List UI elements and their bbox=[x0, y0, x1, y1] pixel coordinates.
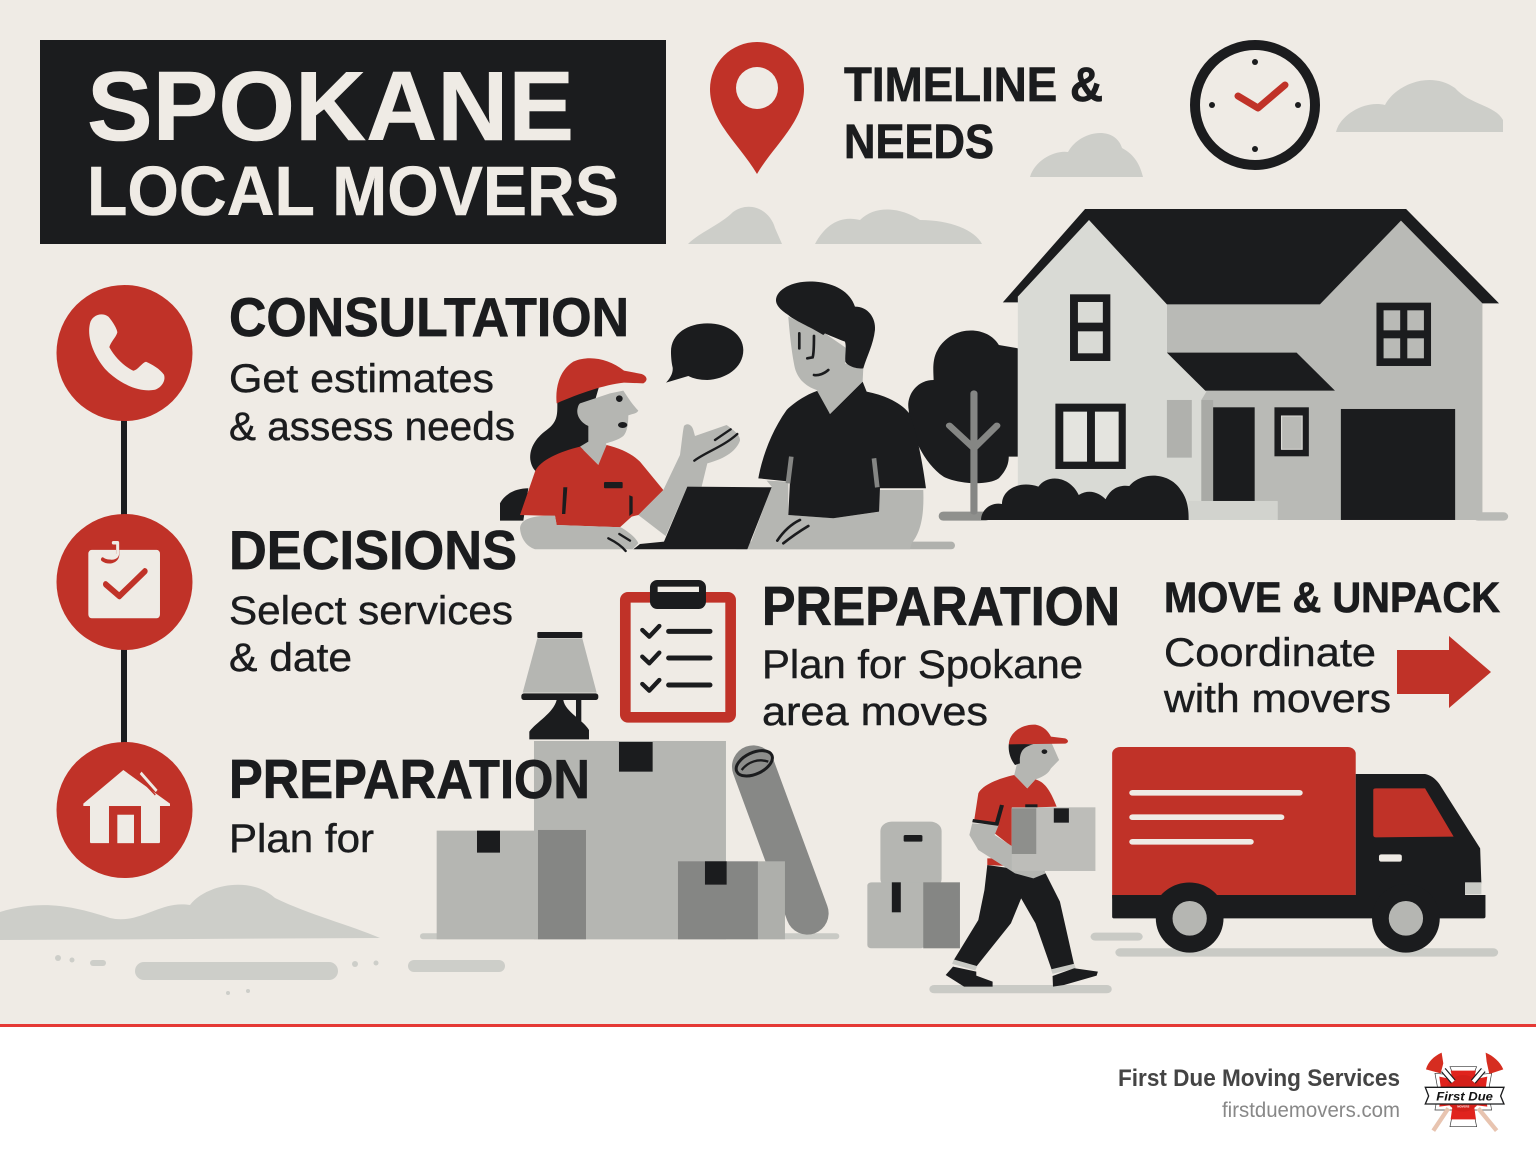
arrow bbox=[1397, 636, 1491, 708]
upper right window bbox=[1376, 303, 1431, 366]
big box bbox=[534, 741, 726, 939]
tree bbox=[908, 331, 1018, 483]
text: preparation, plan for Spokane: PREPARATION bbox=[762, 575, 1120, 637]
company name: First Due Moving Services bbox=[1118, 1065, 1400, 1092]
man's hair bbox=[776, 281, 875, 368]
right wing wall bbox=[1167, 221, 1482, 520]
logo bbox=[1425, 1053, 1504, 1131]
text: consultation: & assess needs bbox=[229, 405, 515, 449]
text: preparation, plan for Spokane bbox=[762, 575, 1120, 734]
mover bbox=[946, 725, 1098, 987]
porch roof bbox=[1167, 353, 1335, 391]
text: consultation: Get estimates bbox=[229, 357, 494, 401]
text: decisions: Select services bbox=[229, 589, 513, 633]
step 2: decisions bbox=[56, 514, 517, 680]
title banner: SPOKANE bbox=[87, 51, 574, 161]
logo: First Due bbox=[1436, 1090, 1493, 1104]
woman's hair bbox=[530, 383, 600, 473]
woman's cap bbox=[556, 358, 647, 403]
text: move and unpack bbox=[1163, 574, 1500, 721]
text: decisions: DECISIONS bbox=[229, 519, 517, 581]
text: preparation: Plan for bbox=[229, 817, 374, 861]
icon: clipboard checklist bbox=[625, 580, 731, 717]
icon: location pin bbox=[710, 42, 804, 174]
table ground bbox=[733, 542, 955, 549]
sapling bbox=[949, 393, 997, 512]
suitcases bbox=[867, 822, 960, 948]
man's arms bbox=[748, 481, 923, 549]
illustration: mover and truck bbox=[867, 725, 1498, 993]
small window bbox=[1274, 407, 1309, 456]
icon: clock bbox=[1195, 45, 1315, 165]
man's facial features bbox=[777, 333, 828, 543]
floor line bbox=[420, 933, 839, 939]
porch details bbox=[1167, 400, 1278, 520]
illustration: consultation scene bbox=[500, 281, 955, 551]
footer bbox=[0, 1024, 1536, 1154]
upper left window bbox=[1070, 294, 1110, 361]
heading: timeline and needs: TIMELINE & bbox=[844, 59, 1103, 112]
ground strip bbox=[939, 512, 1508, 521]
icon: house bbox=[56, 742, 192, 878]
woman's lower arm bbox=[520, 516, 638, 549]
door bbox=[1213, 407, 1255, 501]
right box bbox=[678, 861, 785, 939]
title banner: LOCAL MOVERS bbox=[87, 152, 619, 230]
left box bbox=[437, 830, 586, 939]
text: move and unpack: MOVE & UNPACK bbox=[1164, 574, 1500, 622]
illustration: boxes, lamp and rug bbox=[420, 632, 839, 939]
text: decisions: & date bbox=[229, 636, 352, 680]
truck bbox=[1112, 747, 1485, 953]
text: decisions bbox=[229, 519, 517, 680]
step 3: preparation bbox=[56, 742, 590, 878]
lamp bbox=[521, 632, 598, 739]
laptop bbox=[633, 487, 772, 549]
rolled rug bbox=[732, 745, 807, 913]
text: preparation, plan for Spokane: area moves bbox=[762, 690, 988, 734]
shirt details bbox=[562, 482, 633, 516]
text: move and unpack: with movers bbox=[1163, 677, 1391, 721]
woman's shirt bbox=[520, 445, 663, 527]
text: preparation, plan for Spokane: Plan for Spokane bbox=[762, 643, 1083, 687]
heading: timeline and needs bbox=[844, 59, 1103, 169]
text: preparation bbox=[229, 748, 590, 861]
lower left window bbox=[1055, 404, 1126, 469]
icon: calendar check bbox=[56, 514, 192, 650]
logo: MOVERS bbox=[1457, 1105, 1470, 1109]
icon: phone bbox=[56, 285, 192, 421]
woman's forearm and hand bbox=[638, 424, 740, 536]
website: firstduemovers.com bbox=[1222, 1099, 1400, 1122]
roof bbox=[1003, 209, 1499, 304]
left wing wall bbox=[1018, 220, 1206, 520]
illustration: house with tree bbox=[908, 209, 1508, 521]
step 1: consultation bbox=[56, 285, 629, 449]
ground lines bbox=[929, 933, 1498, 993]
chair back bbox=[500, 488, 528, 521]
woman's finger lines bbox=[608, 429, 737, 551]
title banner bbox=[40, 40, 666, 244]
woman's eye and mouth bbox=[616, 395, 627, 428]
text: consultation bbox=[229, 286, 629, 449]
bushes bbox=[981, 476, 1189, 520]
garage door bbox=[1341, 409, 1455, 520]
man's face and neck bbox=[788, 317, 863, 414]
timeline connector bbox=[121, 415, 127, 750]
text: consultation: CONSULTATION bbox=[229, 286, 629, 348]
text: preparation: PREPARATION bbox=[229, 748, 590, 810]
text: move and unpack: Coordinate bbox=[1164, 631, 1376, 675]
speech bubble bbox=[666, 323, 743, 383]
man's shirt folds bbox=[788, 457, 877, 487]
clouds and landscape bbox=[0, 80, 1503, 995]
man's shirt bbox=[758, 382, 926, 518]
woman's face and neck bbox=[577, 391, 638, 465]
heading: timeline and needs: NEEDS bbox=[844, 116, 994, 169]
